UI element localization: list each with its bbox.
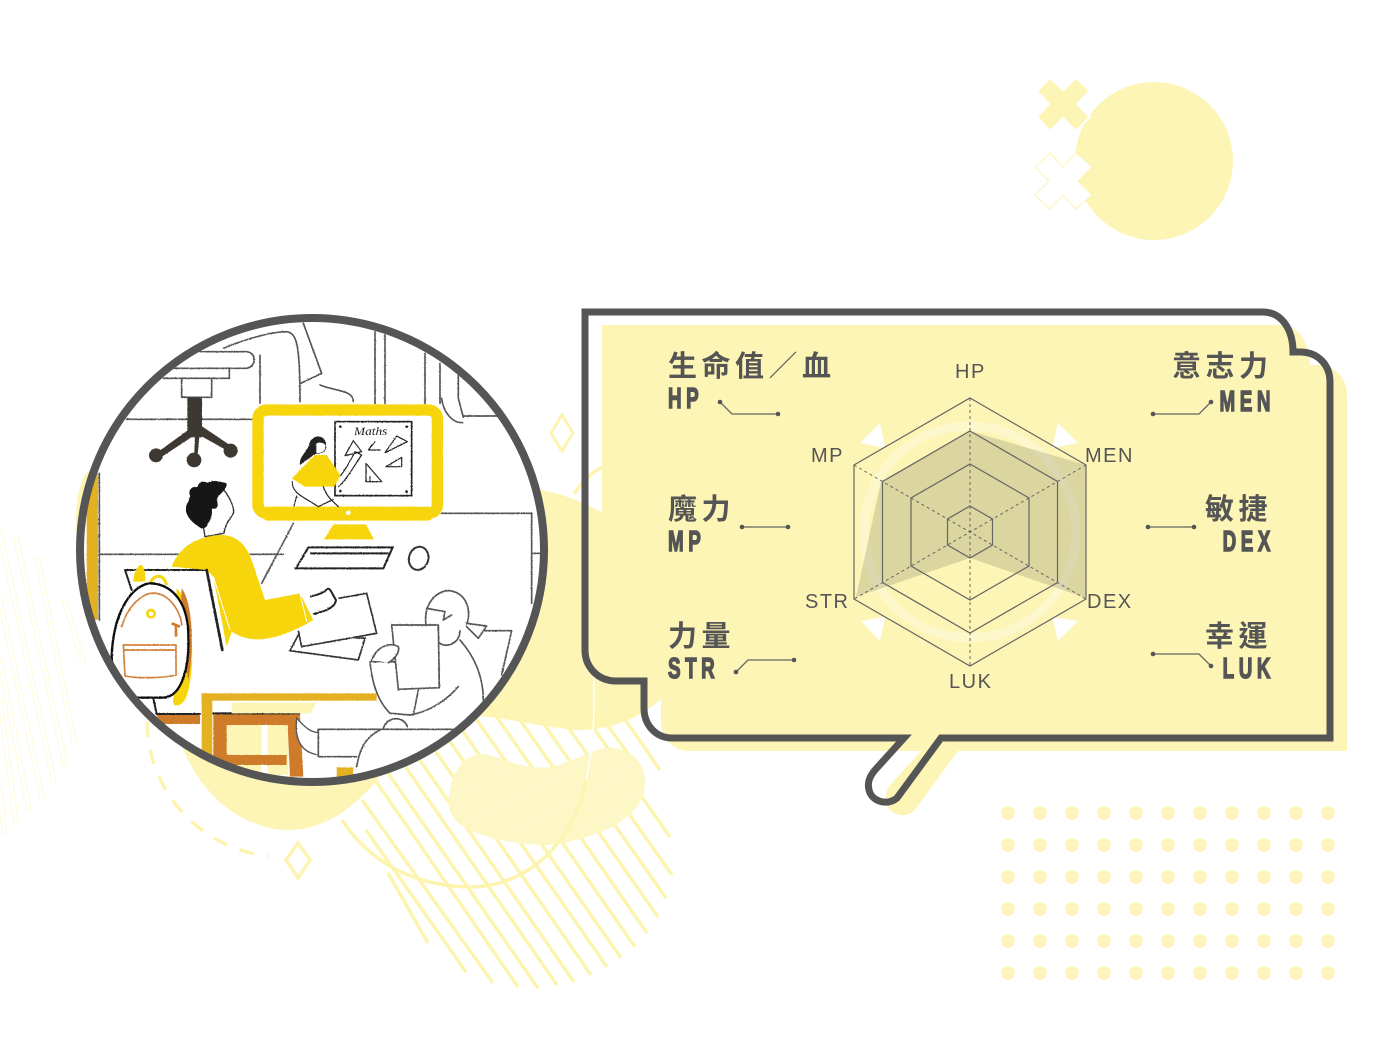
- student sweater: [172, 535, 313, 647]
- mouse: [408, 546, 430, 572]
- data polygon: [856, 431, 1086, 598]
- small sliver left of the circle: [76, 470, 108, 570]
- diamond lower: [286, 843, 310, 878]
- circle ring: [80, 318, 544, 782]
- papers on desk: [290, 593, 377, 660]
- stat label: HP: [668, 349, 836, 416]
- axis label MEN: MEN: [1085, 445, 1134, 467]
- curved line through stripes: [342, 780, 586, 887]
- stat label: LUK: 幸運: [1205, 620, 1272, 653]
- stat label: MP: [668, 493, 790, 558]
- stat label: LUK: LUK: [1223, 653, 1275, 685]
- diagonal stripes: [320, 700, 672, 988]
- dot grid: [1001, 806, 1335, 980]
- student head: [186, 481, 234, 537]
- stat label: MP: 魔力: [668, 493, 735, 526]
- axis label HP: HP: [955, 361, 986, 383]
- stat label: DEX: 敏捷: [1205, 493, 1272, 526]
- illustration: classroom circle: [80, 318, 544, 784]
- sweater cuff line: [213, 577, 307, 630]
- decorative solid cross: [1037, 78, 1090, 131]
- diamond upper: [551, 415, 573, 451]
- desk frame and stool: [153, 693, 377, 784]
- stat label: MEN: 意志力: [1172, 350, 1273, 383]
- glow ring: [864, 426, 1076, 638]
- small curve above the blob: [574, 467, 602, 494]
- white corner triangles: [860, 423, 1078, 641]
- teacher on screen: [292, 437, 362, 507]
- keyboard: [296, 547, 393, 568]
- background blob lower left: [170, 700, 400, 830]
- radar chart: [805, 361, 1134, 693]
- circle background: [80, 318, 544, 782]
- stat label: MP: MP: [668, 526, 705, 558]
- axis label STR: STR: [805, 591, 850, 613]
- chair edge: [207, 570, 222, 650]
- axis label DEX: DEX: [1087, 591, 1133, 613]
- stat label: HP: HP: [668, 383, 703, 415]
- stat label: DEX: DEX: [1223, 526, 1275, 558]
- bean shape: [449, 748, 645, 845]
- background office lines: [99, 323, 540, 620]
- student chair back: [125, 570, 222, 713]
- monitor: [258, 410, 437, 539]
- dashed arc: [147, 722, 268, 856]
- bubble outline: [585, 312, 1330, 802]
- left pale stripes: [0, 533, 83, 831]
- student hand: [310, 589, 336, 614]
- stat label: HP: 生命值／血: [668, 349, 836, 383]
- gold wall bar: [87, 473, 98, 620]
- pale curve over the blob: [586, 670, 594, 780]
- decorative outlined cross: [1035, 153, 1092, 209]
- axes: [854, 398, 1086, 666]
- stat label: MEN: MEN: [1219, 386, 1275, 418]
- axis label LUK: LUK: [949, 671, 992, 693]
- right student: [318, 591, 512, 767]
- hexagon rings: [854, 398, 1086, 666]
- whiteboard: Maths: [353, 426, 388, 438]
- stat label: STR: 力量: [668, 620, 735, 653]
- stat label: MEN: [1151, 350, 1275, 418]
- axis label MP: MP: [811, 445, 844, 467]
- stat label: STR: [668, 620, 796, 685]
- decorative circle top right: [1075, 82, 1233, 240]
- panel: speech bubble: [585, 312, 1347, 815]
- stat label: STR: STR: [668, 653, 719, 685]
- bubble offset fill: [602, 325, 1347, 815]
- stat label: LUK: [1151, 620, 1275, 685]
- stat label: DEX: [1146, 493, 1275, 558]
- office chair base: [149, 397, 238, 467]
- whiteboard: [335, 422, 412, 496]
- background blob right: [470, 488, 680, 730]
- backpack: [112, 565, 192, 706]
